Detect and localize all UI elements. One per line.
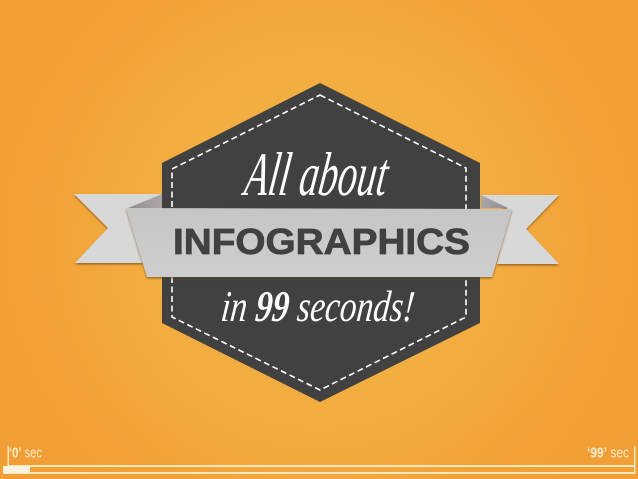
- timeline start label: ‘0’ sec: [9, 444, 42, 462]
- heading: in 99 seconds: in 99 seconds!: [219, 282, 417, 331]
- timeline progress fill: [3, 466, 30, 473]
- timeline bar: [3, 444, 636, 474]
- ribbon band: [126, 208, 512, 277]
- timeline rails: [3, 446, 636, 474]
- ribbon tail: right: [481, 195, 559, 264]
- timeline end label: ‘99’ sec: [587, 444, 629, 462]
- badge: dark hexagon with dashed stitching: [162, 83, 480, 402]
- ribbon: [74, 194, 559, 277]
- ribbon fold: left: [128, 194, 162, 208]
- ribbon fold: right: [481, 195, 508, 208]
- ribbon label: INFOGRAPHICS: INFOGRAPHICS: [173, 221, 470, 262]
- heading: All about: All about: [239, 140, 394, 209]
- ribbon tail: left: [74, 194, 162, 263]
